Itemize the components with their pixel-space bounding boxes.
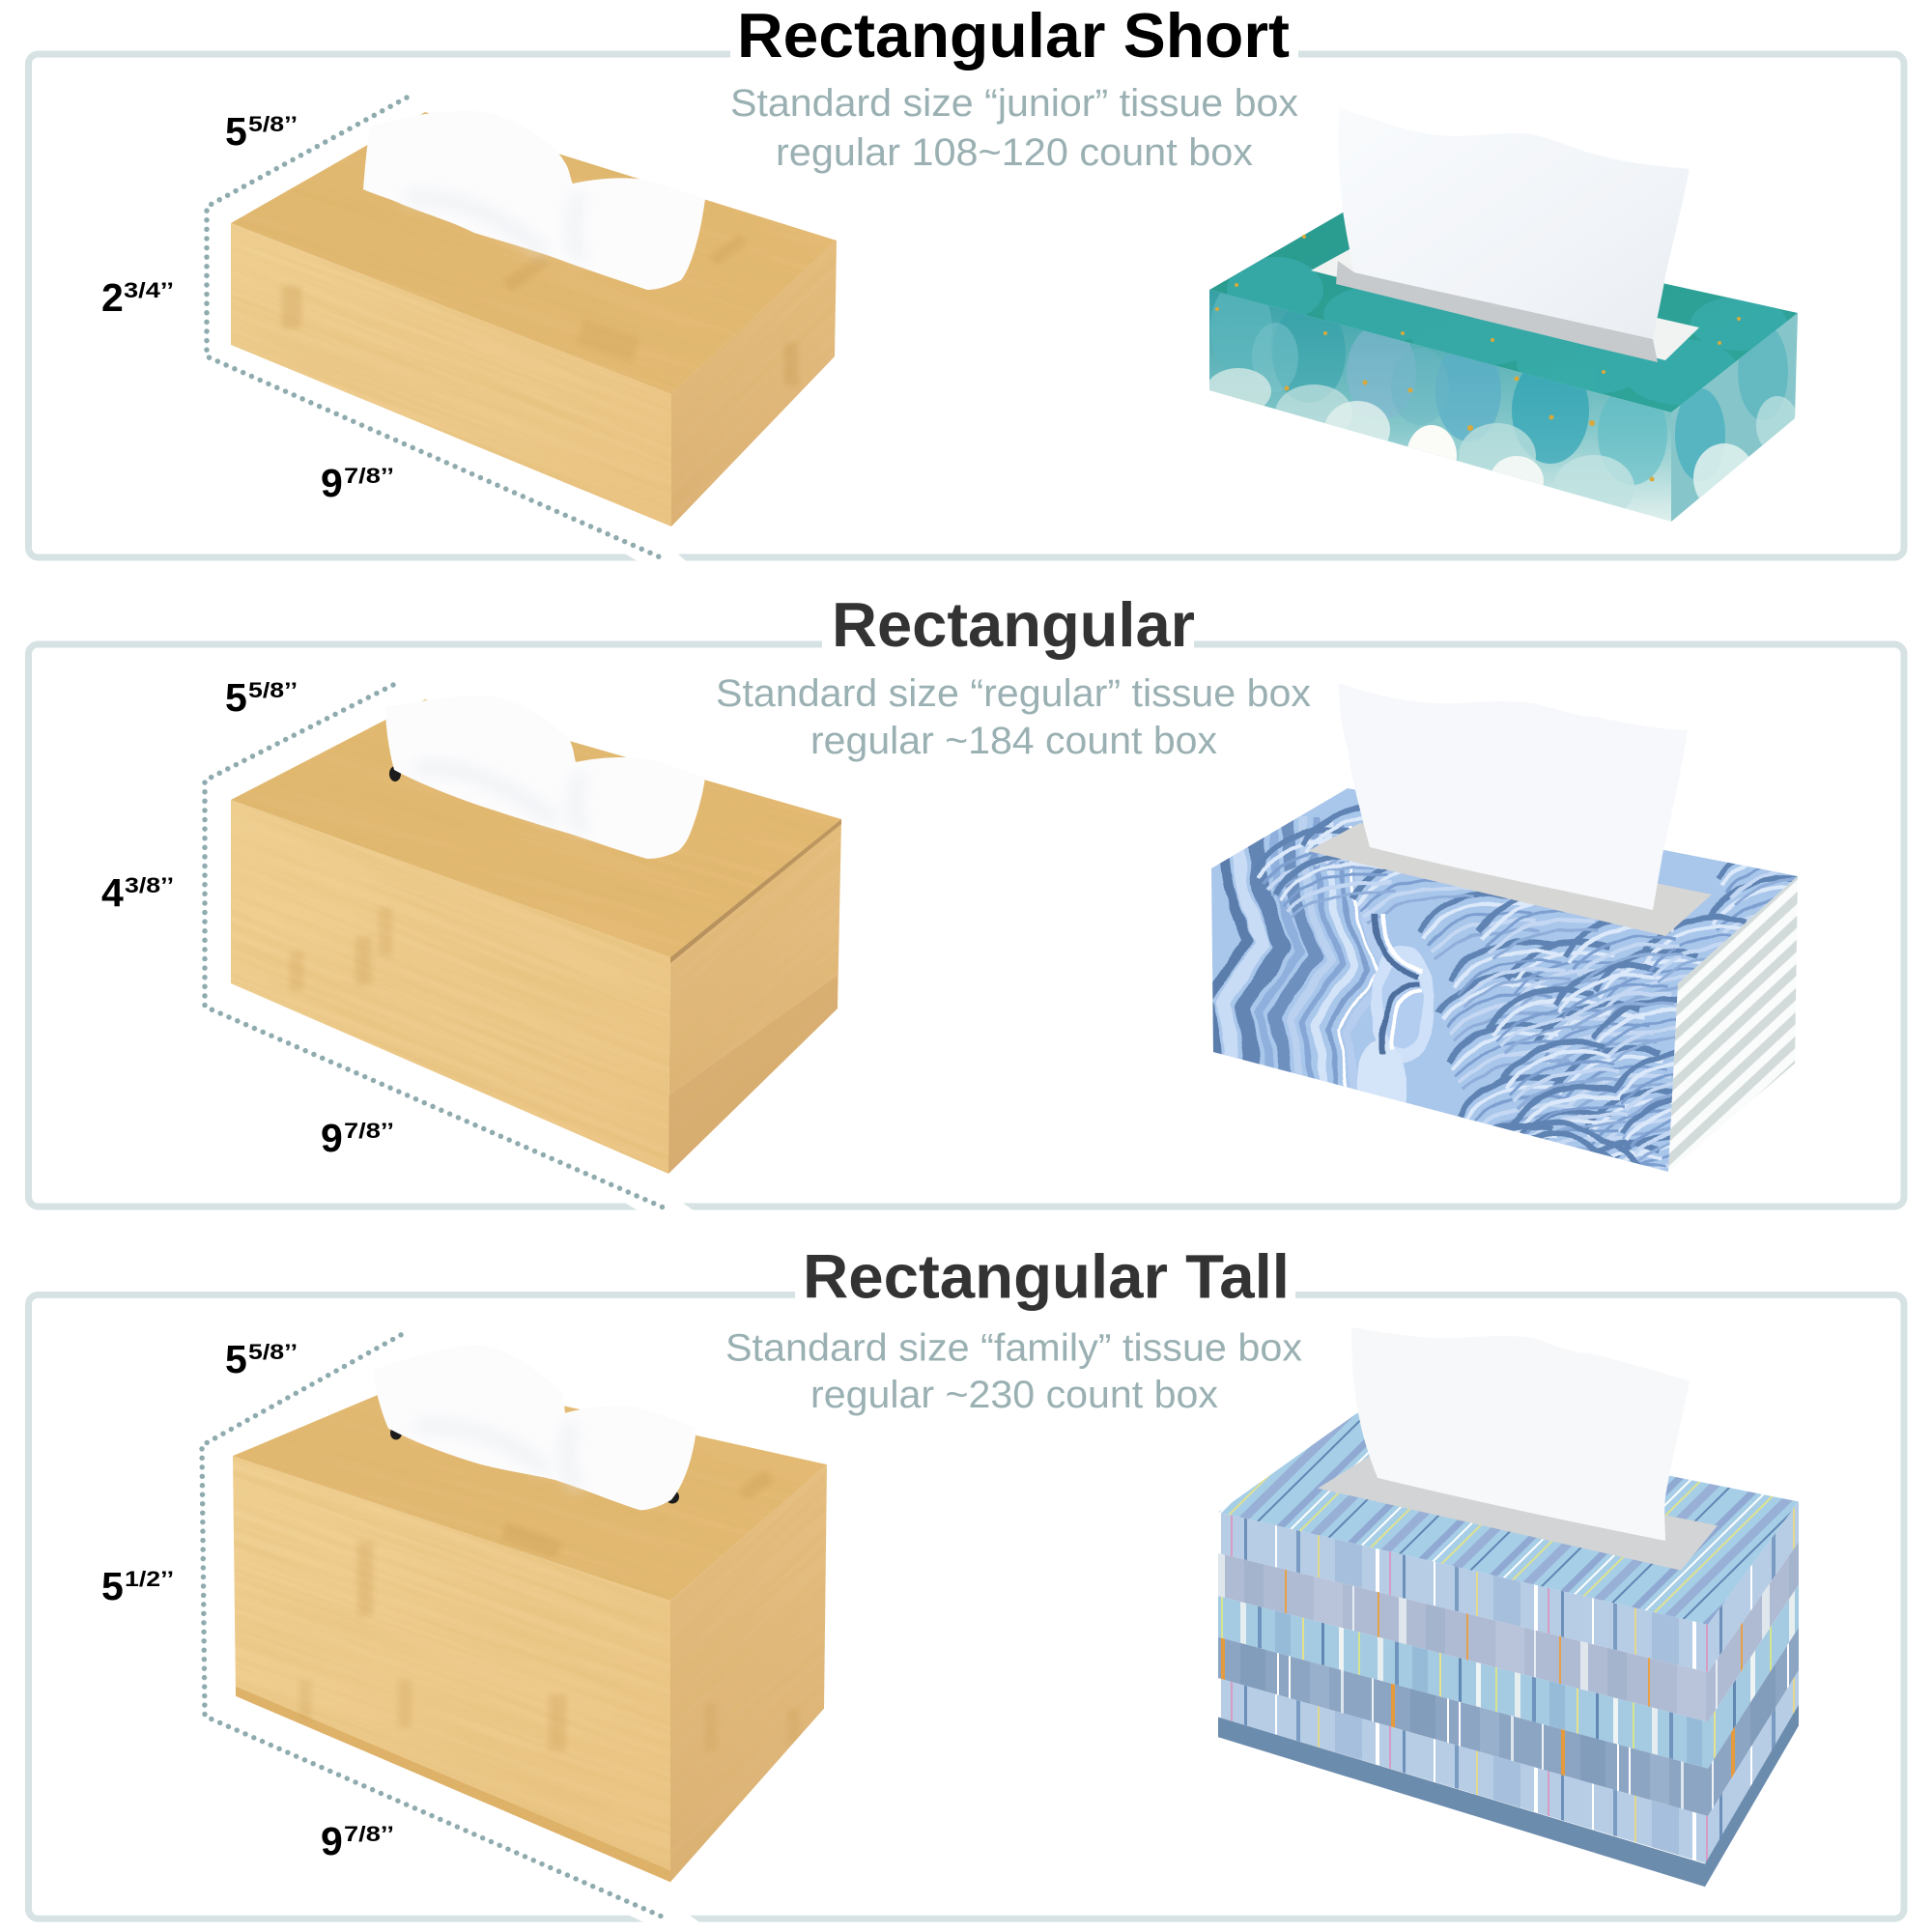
bamboo tissue box — [233, 1395, 827, 1882]
dimension: depth, tall: 5/8’’ — [248, 1340, 298, 1364]
dimension: depth, short: 5/8’’ — [248, 112, 298, 136]
subtitle: Standard size “family” tissue box — [725, 1327, 1302, 1369]
dimension: height, regular: 4 — [101, 870, 124, 915]
heading: Rectangular — [832, 589, 1195, 660]
subtitle: Standard size “regular” tissue box — [716, 672, 1311, 715]
dimension: width, regular — [321, 1116, 394, 1160]
dimension guide line — [205, 685, 666, 1208]
dimension: width, tall: 7/8’’ — [344, 1822, 394, 1846]
dimension: height, short — [101, 275, 174, 320]
dimension: height, tall — [101, 1564, 174, 1608]
dimension: width, regular: 7/8’’ — [344, 1119, 394, 1143]
dimension: height, short: 3/4’’ — [124, 278, 174, 302]
panel: rectangular tall — [29, 1242, 1904, 1923]
dimension guide line — [207, 98, 663, 558]
subtitle — [725, 1327, 1302, 1416]
dimension: width, regular: 9 — [321, 1116, 343, 1160]
panel: rectangular — [25, 601, 1907, 1209]
dimension: width, tall — [321, 1819, 394, 1863]
subtitle — [716, 672, 1311, 762]
tissue puff — [363, 111, 705, 290]
subtitle: Standard size “junior” tissue box — [730, 82, 1298, 125]
dimension: width, short: 7/8’’ — [344, 464, 394, 488]
subtitle: regular 108~120 count box — [776, 131, 1253, 174]
teal tissue box — [1206, 108, 1799, 522]
panel frame — [29, 644, 1904, 1207]
dimension: width, tall: 9 — [321, 1819, 343, 1863]
dimension: width, short — [321, 461, 394, 505]
subtitle: regular ~184 count box — [810, 720, 1217, 762]
dimension: depth, tall — [225, 1337, 298, 1381]
dimension: height, regular: 3/8’’ — [125, 873, 174, 897]
bamboo tissue box — [231, 112, 837, 526]
panel frame — [29, 1294, 1904, 1918]
dimension: depth, regular: 5/8’’ — [248, 678, 298, 702]
dimension: depth, short — [225, 109, 298, 154]
heading: Rectangular Short — [737, 0, 1290, 71]
heading: Rectangular Tall — [803, 1242, 1290, 1311]
tissue puff — [385, 696, 705, 859]
panel: rectangular short — [25, 12, 1907, 560]
dimension: width, short: 9 — [321, 461, 343, 505]
dimension: height, tall: 1/2’’ — [125, 1567, 174, 1591]
dimension: height, regular — [101, 870, 174, 915]
dimension: height, tall: 5 — [101, 1564, 124, 1608]
dimension: height, short: 2 — [101, 275, 124, 320]
striped blue tissue box — [1218, 1327, 1799, 1887]
dimension: depth, short: 5 — [225, 109, 247, 154]
panel frame — [29, 54, 1904, 557]
dimension: depth, regular: 5 — [225, 675, 247, 720]
dimension: depth, regular — [225, 675, 298, 720]
dimension guide line — [202, 1335, 666, 1918]
subtitle: regular ~230 count box — [810, 1374, 1218, 1416]
dimension: depth, tall: 5 — [225, 1337, 247, 1381]
bamboo tissue box — [231, 699, 841, 1174]
tissue puff — [373, 1346, 696, 1510]
subtitle — [730, 82, 1298, 174]
marbled blue tissue box — [1211, 684, 1798, 1172]
